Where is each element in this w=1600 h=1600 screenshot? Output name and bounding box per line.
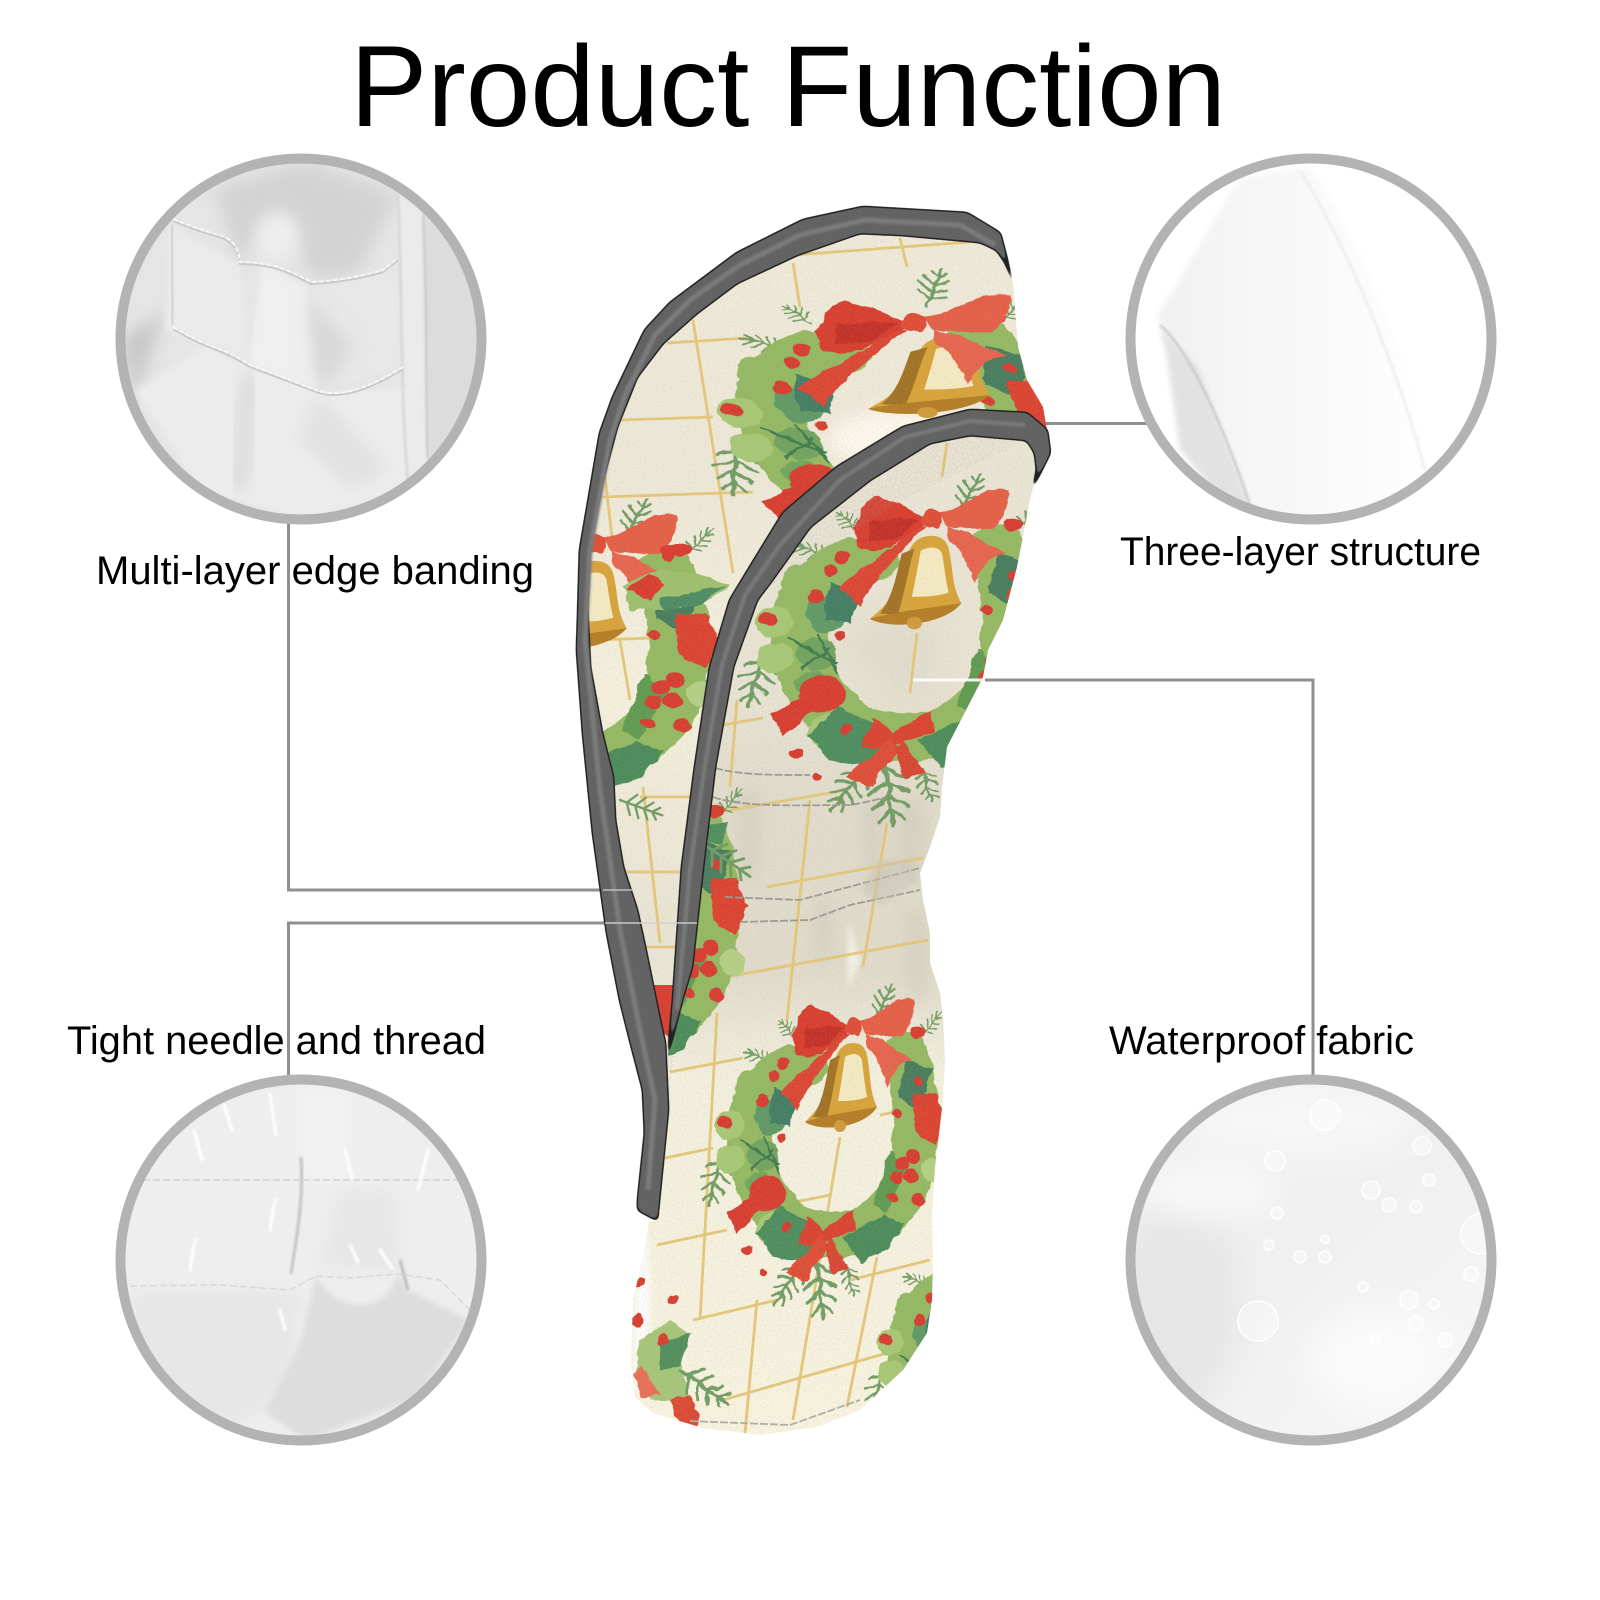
wreath on lower body bbox=[696, 980, 947, 1322]
line: waterproof fabric bbox=[980, 680, 1313, 1076]
wreath ring on back piece, top bbox=[710, 268, 1047, 518]
panel: detail circle multi-layer edge banding bbox=[120, 158, 482, 520]
leaf arm on back piece, left bbox=[622, 545, 730, 612]
wreath on flap bbox=[736, 473, 1027, 828]
fabric grain texture, front bbox=[625, 405, 1055, 1440]
connector lines bbox=[288, 424, 1313, 1076]
label: waterproof fabric: Waterproof fabric bbox=[1109, 1019, 1414, 1063]
label: multi-layer edge banding: Multi-layer edge banding bbox=[96, 549, 534, 593]
wreath on back piece, left bbox=[589, 498, 718, 787]
bell on back piece bbox=[868, 336, 990, 418]
panel: detail circle tight needle and thread bbox=[120, 1080, 482, 1440]
red ribbon between bands bbox=[654, 985, 673, 1037]
line: three-layer structure bbox=[1040, 422, 1150, 425]
bow on back piece bbox=[794, 295, 1011, 405]
panel: detail circle waterproof fabric bbox=[1120, 1080, 1501, 1440]
partial wreath, middle left bbox=[668, 787, 749, 1056]
product: golf head cover with wreath pattern bbox=[576, 206, 1052, 1435]
label: tight needle and thread: Tight needle and thread bbox=[67, 1019, 486, 1063]
flap binding band bbox=[668, 410, 1050, 1055]
front piece fabric bbox=[631, 437, 1036, 1435]
faint leader line overlays on product bbox=[603, 680, 985, 923]
fabric grain texture bbox=[590, 235, 1046, 1094]
back binding band bbox=[577, 207, 1013, 1220]
label: three-layer structure: Three-layer structure bbox=[1120, 530, 1481, 574]
gather stitching bbox=[690, 768, 920, 1425]
partial wreath, bottom right bbox=[864, 1272, 933, 1402]
panel: detail circle three-layer structure bbox=[1130, 158, 1492, 520]
line: multi-layer edge banding bbox=[288, 524, 605, 890]
back piece fabric bbox=[588, 234, 1047, 1074]
title: Product Function bbox=[350, 23, 1226, 151]
line: tight needle and thread bbox=[288, 923, 608, 1076]
partial wreath, bottom left bbox=[632, 1278, 737, 1432]
